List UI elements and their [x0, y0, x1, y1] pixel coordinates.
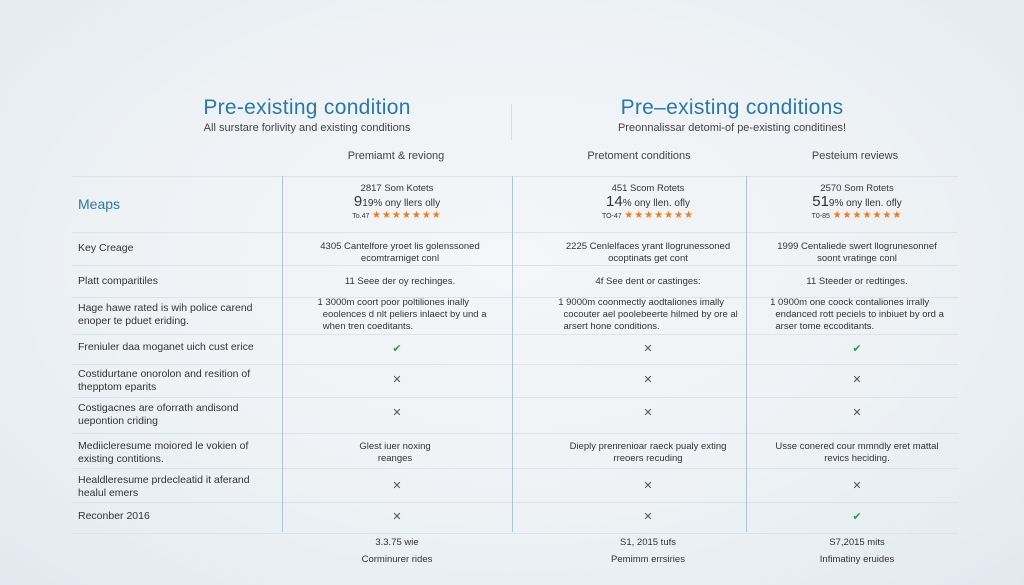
- column 1 values: 11 Seee der oy rechinges.: [345, 276, 455, 287]
- row labels: Key Creage: [78, 242, 133, 254]
- column 3 values: ✔: [852, 343, 862, 355]
- row labels: Platt comparitiles: [78, 275, 158, 287]
- column 2 values: ocoptinats get cont: [608, 253, 688, 264]
- column 1 values: 1 3000m coort poor poltiliones inally: [318, 297, 469, 308]
- column 1 values: [318, 183, 487, 565]
- column 3 values: endanced rott peciels to inbiuet by ord a: [775, 309, 944, 320]
- column 3 values: ✕: [852, 407, 862, 419]
- column 2 values: Dieply prenrenioar raeck pualy exting: [570, 441, 726, 452]
- column 3 values: 2570 Som Rotets: [820, 183, 894, 194]
- column 1 values: To.47 ★★★★★★★: [352, 210, 442, 221]
- column 2 values: ✕: [643, 343, 653, 355]
- row labels: Costidurtane onorolon and resition of: [78, 368, 250, 380]
- column 3 values: soont vratinge conl: [817, 253, 897, 264]
- column 2 values: 1 9000m coonmectly aodtaliones imally: [558, 297, 724, 308]
- column 1 values: eoolences d nlt peliers inlaect by und a: [323, 309, 486, 320]
- column 3 values: S7,2015 mits: [829, 537, 885, 548]
- column 3 values: 1999 Centaliede swert llogrunesonnef: [777, 241, 937, 252]
- column 1 values: when tren coeditants.: [323, 321, 413, 332]
- row labels: Costigacnes are oforrath andisond: [78, 402, 239, 414]
- column 3 values: 11 Steeder or redtinges.: [806, 276, 908, 287]
- column 1 values: ✕: [392, 511, 402, 523]
- column 3 values: ✕: [852, 374, 862, 386]
- column 2 values: 451 Scom Rotets: [612, 183, 684, 194]
- column 2 values: rreoers recuding: [613, 453, 683, 464]
- column headers: Premiamt & reviong: [348, 150, 444, 162]
- row labels: Freniuler daa moganet uich cust erice: [78, 341, 254, 353]
- column 1 values: ✔: [392, 343, 402, 355]
- column 3 values: [770, 183, 944, 565]
- row labels: uepontion criding: [78, 415, 158, 427]
- column 2 values: 4f See dent or castinges:: [595, 276, 701, 287]
- subtitle: right: Preonnalissar detomi-of pe-existing conditines!: [618, 122, 846, 134]
- column 1 values: ✕: [392, 374, 402, 386]
- column 1 values: ✕: [392, 480, 402, 492]
- row labels: [78, 196, 254, 522]
- column 3 values: ✕: [852, 480, 862, 492]
- title: right: Pre–existing conditions: [621, 96, 843, 119]
- column 3 values: 1 0900m one coock contaliones irrally: [770, 297, 929, 308]
- row labels: enoper te pduet eriding.: [78, 315, 189, 327]
- title: left: Pre-existing condition: [203, 96, 411, 119]
- row labels: healul emers: [78, 487, 138, 499]
- row labels: Mediicleresume moiored le vokien of: [78, 440, 248, 452]
- column 3 values: Usse conered cour mmndly eret mattal: [775, 441, 939, 452]
- column 2 values: ✕: [643, 480, 653, 492]
- column 2 values: ✕: [643, 374, 653, 386]
- column 2 values: cocouter ael poolebeerte hilmed by ore al: [563, 309, 738, 320]
- column headers: Pesteium reviews: [812, 150, 898, 162]
- column 1 values: Corminurer rides: [362, 554, 432, 565]
- column 2 values: S1, 2015 tufs: [620, 537, 676, 548]
- column headers: Pretoment conditions: [587, 150, 691, 162]
- column 2 values: 2225 Cenlelfaces yrant llogrunessoned: [566, 241, 730, 252]
- column 2 values: 14% ony llen. ofly: [606, 193, 690, 210]
- row labels: Reconber 2016: [78, 510, 150, 522]
- column 2 values: ✕: [643, 511, 653, 523]
- subtitle: left: All surstare forlivity and existing conditions: [204, 122, 410, 134]
- column 2 values: arsert hone conditions.: [563, 321, 660, 332]
- column 1 values: 3.3.75 wie: [375, 537, 419, 548]
- column 3 values: revics heciding.: [824, 453, 890, 464]
- column 3 values: arser tome eccoditants.: [775, 321, 874, 332]
- row labels: Meaps: [78, 196, 120, 212]
- row labels: Hage hawe rated is wih police carend: [78, 302, 253, 314]
- column 1 values: Glest iuer noxing: [359, 441, 431, 452]
- row labels: existing contitions.: [78, 453, 164, 465]
- column 1 values: 919% ony llers olly: [354, 193, 440, 210]
- column 3 values: Infimatiny eruides: [820, 554, 894, 565]
- column 3 values: 519% ony llen. ofly: [812, 193, 902, 210]
- column 2 values: [558, 183, 738, 565]
- column 1 values: 2817 Som Kotets: [361, 183, 433, 194]
- column 1 values: ✕: [392, 407, 402, 419]
- column 1 values: reanges: [378, 453, 412, 464]
- row labels: Healdleresume prdecleatid it aferand: [78, 474, 250, 486]
- column 2 values: ✕: [643, 407, 653, 419]
- column 1 values: 4305 Cantelfore yroet lis golenssoned: [320, 241, 480, 252]
- column headers: [348, 150, 898, 162]
- row labels: thepptom eparits: [78, 381, 156, 393]
- column 1 values: ecomtrarniget conl: [361, 253, 439, 264]
- column 2 values: Pemimm errsiries: [611, 554, 685, 565]
- column 3 values: T0-85 ★★★★★★★: [812, 210, 902, 221]
- column 2 values: TO-47 ★★★★★★★: [602, 210, 694, 221]
- column 3 values: ✔: [852, 511, 862, 523]
